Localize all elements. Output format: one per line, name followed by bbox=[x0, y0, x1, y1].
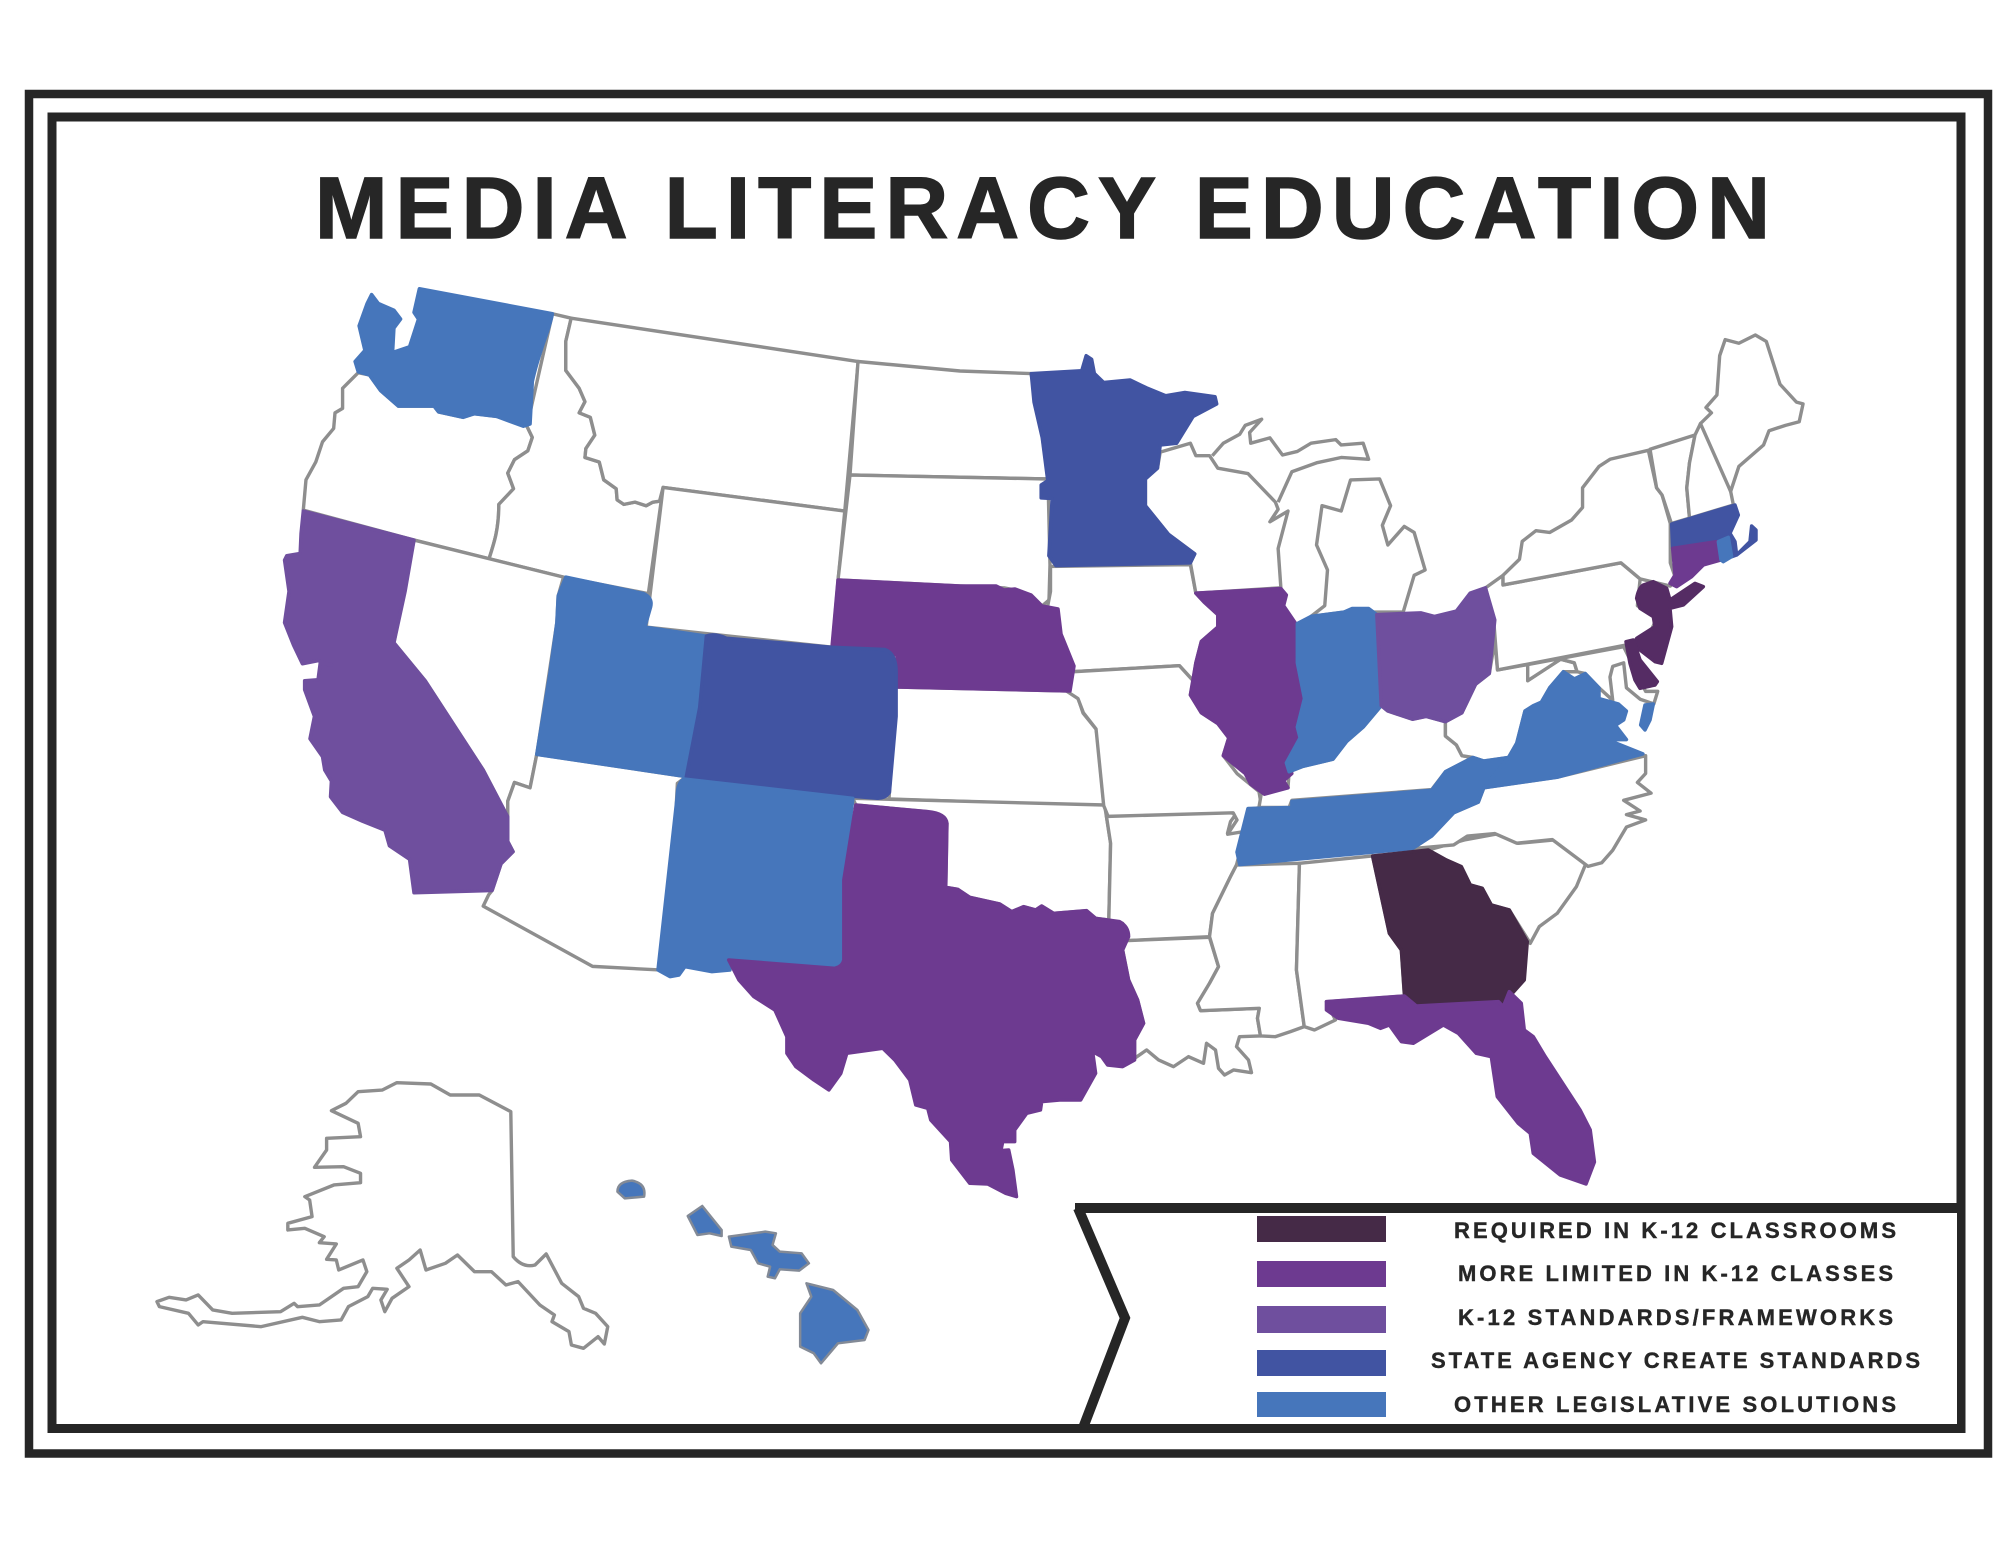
legend label: more limited: MORE LIMITED IN K-12 CLASSES bbox=[1458, 1261, 1893, 1286]
legend panel bbox=[1075, 1208, 1957, 1428]
state: Wyoming bbox=[646, 487, 845, 647]
state: Arkansas bbox=[1106, 812, 1245, 941]
state: New Hampshire bbox=[1687, 424, 1733, 518]
state: Maine bbox=[1700, 335, 1803, 491]
state: Oklahoma bbox=[853, 798, 1111, 920]
state: Nevada bbox=[394, 540, 564, 817]
state: New York bbox=[1503, 450, 1676, 586]
state: Nebraska bbox=[832, 580, 1074, 691]
state: Florida bbox=[1326, 992, 1594, 1184]
legend chevron border bbox=[1075, 1208, 1957, 1428]
state: Utah bbox=[537, 577, 706, 777]
map: Hawaii islands bbox=[617, 1181, 869, 1363]
state: Minnesota bbox=[1031, 356, 1217, 566]
state: California bbox=[285, 511, 513, 893]
legend label: required: REQUIRED IN K-12 CLASSROOMS bbox=[1454, 1218, 1896, 1243]
state: Washington bbox=[355, 289, 552, 426]
state: North Carolina bbox=[1413, 756, 1651, 866]
state: Georgia bbox=[1373, 850, 1527, 1007]
legend label: state agency: STATE AGENCY CREATE STANDARDS bbox=[1431, 1348, 1920, 1373]
state: Illinois bbox=[1190, 589, 1304, 794]
state: Iowa bbox=[1048, 565, 1218, 681]
state: Kentucky bbox=[1259, 706, 1473, 807]
state: Virginia bbox=[1484, 672, 1643, 788]
state: New Jersey bbox=[1635, 582, 1703, 663]
map: contiguous United States bbox=[285, 289, 1803, 1197]
state: Oregon bbox=[303, 373, 532, 559]
map: Alaska bbox=[157, 1083, 608, 1348]
legend swatch: required bbox=[1257, 1216, 1386, 1242]
island: Maui group bbox=[729, 1232, 809, 1278]
state: Maryland bbox=[1528, 647, 1658, 704]
state: North Dakota bbox=[850, 362, 1048, 479]
state: Connecticut bbox=[1670, 542, 1721, 587]
state: Texas bbox=[729, 805, 1144, 1197]
state: Kansas bbox=[889, 687, 1104, 806]
legend label: other legislative: OTHER LEGISLATIVE SOLUTIONS bbox=[1454, 1392, 1896, 1417]
island: Kauai bbox=[617, 1181, 644, 1198]
legend swatch: standards bbox=[1257, 1306, 1386, 1333]
state: Michigan upper peninsula bbox=[1212, 419, 1369, 502]
state: Rhode Island bbox=[1718, 537, 1732, 562]
state: Michigan lower peninsula bbox=[1311, 479, 1425, 616]
state: Mississippi bbox=[1198, 863, 1304, 1037]
state: Arizona bbox=[483, 754, 686, 970]
state: New Mexico bbox=[658, 779, 853, 977]
state: Alabama bbox=[1296, 856, 1404, 1030]
state: West Virginia bbox=[1445, 641, 1577, 761]
state: Idaho bbox=[489, 314, 663, 594]
title: MEDIA LITERACY EDUCATION bbox=[315, 160, 1770, 257]
state: Massachusetts bbox=[1672, 505, 1756, 557]
state: Pennsylvania bbox=[1485, 563, 1657, 670]
state: Tennessee bbox=[1237, 757, 1508, 865]
state: Indiana bbox=[1286, 609, 1381, 772]
state: Delaware bbox=[1626, 640, 1657, 688]
legend swatch: more limited bbox=[1257, 1261, 1386, 1287]
state: Louisiana bbox=[1123, 937, 1260, 1075]
state: Vermont bbox=[1650, 435, 1695, 524]
island: Big Island bbox=[800, 1283, 869, 1363]
state: South Dakota bbox=[838, 475, 1050, 606]
island: Oahu bbox=[688, 1206, 722, 1236]
state: Colorado bbox=[686, 635, 896, 798]
legend label: standards: K-12 STANDARDS/FRAMEWORKS bbox=[1458, 1305, 1893, 1330]
legend swatch: other legislative bbox=[1257, 1392, 1386, 1417]
state: Missouri bbox=[1067, 666, 1262, 834]
state: Virginia eastern shore bbox=[1641, 704, 1653, 730]
state: Ohio bbox=[1377, 588, 1495, 722]
state: South Carolina bbox=[1428, 833, 1586, 943]
state: Wisconsin bbox=[1145, 443, 1288, 593]
legend swatch: state agency bbox=[1257, 1350, 1386, 1376]
state: Montana bbox=[566, 318, 858, 511]
